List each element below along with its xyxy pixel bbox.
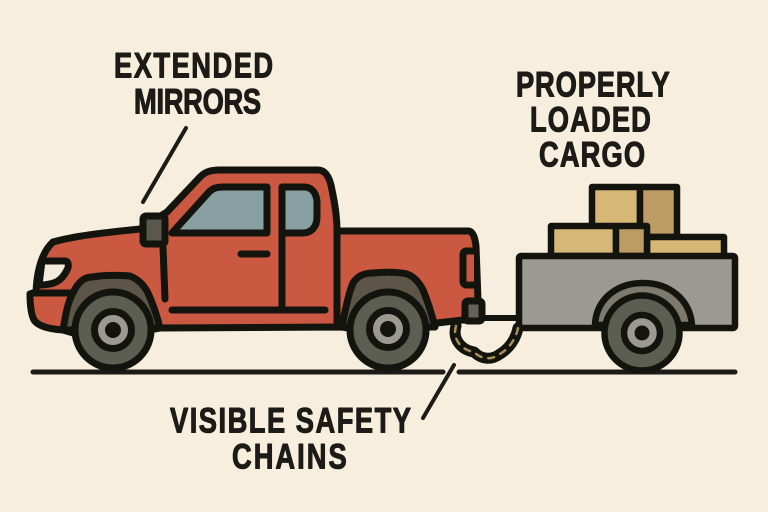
label: extended mirrors: MIRRORS xyxy=(134,82,261,121)
front wheel arch xyxy=(63,275,160,330)
trailer bed xyxy=(519,256,735,328)
door lines xyxy=(163,231,337,327)
front wheel xyxy=(75,292,151,368)
label: extended mirrors: EXTENDED xyxy=(114,46,273,85)
trailer wheel xyxy=(604,296,680,370)
cargo boxes xyxy=(551,187,724,258)
rear wheel arch xyxy=(342,272,435,327)
safety chains xyxy=(455,326,518,358)
trailer xyxy=(519,187,735,370)
arrow: chains leader line xyxy=(423,365,454,418)
label: visible safety chains: CHAINS xyxy=(232,437,347,476)
label: properly loaded cargo: LOADED xyxy=(530,100,651,139)
trailer fender xyxy=(595,283,692,325)
windshield xyxy=(172,187,267,233)
truck xyxy=(30,170,482,368)
front bumper line xyxy=(34,290,72,296)
label: properly loaded cargo: PROPERLY xyxy=(516,65,670,104)
label: extended mirrors xyxy=(114,46,273,121)
label: visible safety chains: VISIBLE SAFETY xyxy=(170,401,411,440)
tow hitch bar xyxy=(480,315,517,321)
label: properly loaded cargo: CARGO xyxy=(539,135,645,174)
rear side window xyxy=(282,187,317,233)
label: properly loaded cargo xyxy=(516,65,670,174)
ground line xyxy=(33,370,735,374)
headlight xyxy=(39,261,68,285)
arrow: mirrors leader line xyxy=(143,128,186,202)
truck body xyxy=(30,170,478,335)
rear wheel xyxy=(350,292,426,368)
side mirror xyxy=(143,216,165,244)
rear bumper hitch xyxy=(465,301,482,321)
label: visible safety chains xyxy=(170,401,411,476)
tail light xyxy=(463,251,474,285)
